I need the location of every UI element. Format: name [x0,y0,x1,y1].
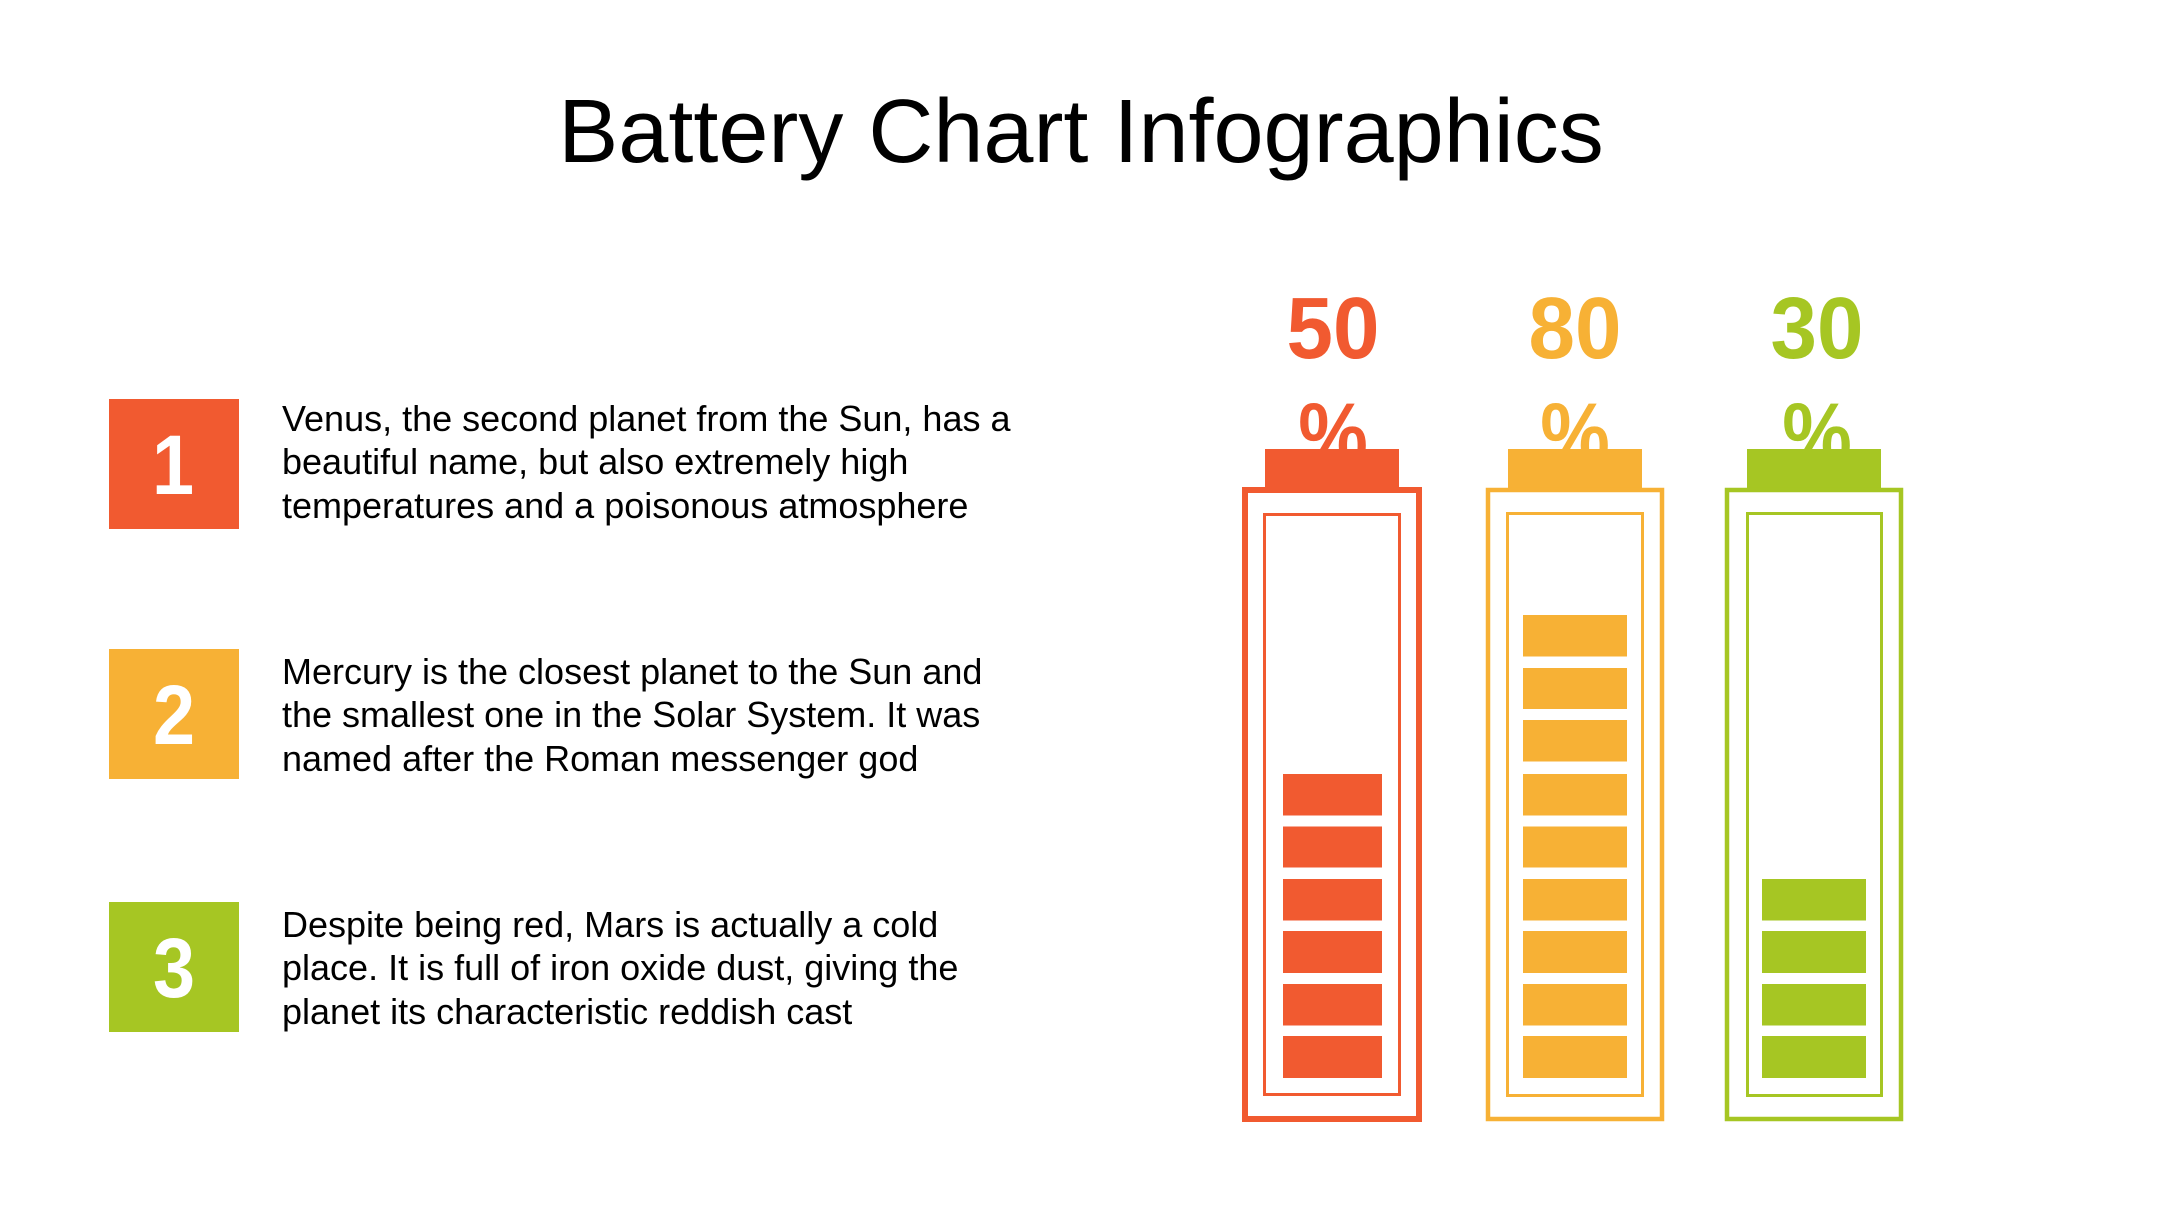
battery inner casing [1508,514,1642,1096]
label 30%: 30 [1771,280,1863,377]
item 1: Venus [109,398,1011,529]
label 80%: 80 [1529,280,1621,377]
battery outer casing [1245,490,1419,1119]
text: Mercury: named after the Roman messenger god [282,738,918,779]
label 30% [1771,280,1863,483]
item 3: Mars [109,902,958,1032]
text: Mars: place. It is full of iron oxide dust, giving the [282,947,958,988]
text: Mars [282,904,958,1032]
number badge 2 [109,649,239,779]
label 30%: % [1782,385,1852,483]
text: Venus: beautiful name, but also extremely high [282,441,908,482]
number badge 1 [109,399,239,529]
text: Venus: temperatures and a poisonous atmosphere [282,485,968,526]
item 2: Mercury [109,649,982,779]
battery 2: 80% [1488,280,1662,1119]
text: Venus [282,398,1011,526]
battery outer casing [1488,490,1662,1119]
label 50%: % [1298,385,1368,483]
battery 1: 50% [1245,280,1419,1119]
label 50% [1287,280,1379,483]
battery cap [1265,449,1399,487]
number badge 3: 3 [153,921,195,1015]
number badge 2: 2 [153,668,195,762]
text: Mars: Despite being red, Mars is actually a cold [282,904,938,945]
text: Mercury [282,651,982,779]
number badge 1: 1 [152,418,194,512]
battery cap [1508,449,1642,488]
battery inner casing [1264,514,1400,1094]
charge bars: 4 [1762,879,1866,1078]
battery inner casing [1748,514,1882,1096]
battery cap [1747,449,1881,488]
battery outer casing [1727,490,1901,1119]
label 80%: % [1540,385,1610,483]
text: Mars: planet its characteristic reddish cast [282,991,852,1032]
label 50%: 50 [1287,280,1379,377]
charge bars: 9 [1523,615,1627,1078]
charge bars: 6 [1283,774,1382,1078]
text: Mercury: Mercury is the closest planet to the Sun and [282,651,982,692]
text: Venus: Venus, the second planet from the Sun, has a [282,398,1011,439]
title: Battery Chart Infographics [558,82,1604,182]
text: Mercury: the smallest one in the Solar System. It was [282,694,980,735]
label 80% [1529,280,1621,483]
number badge 3 [109,902,239,1032]
battery 3: 30% [1727,280,1901,1119]
